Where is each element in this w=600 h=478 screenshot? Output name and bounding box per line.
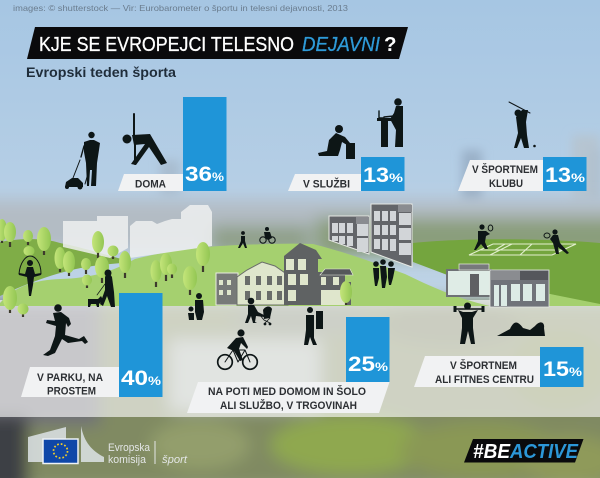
- icon: person with boxes: [304, 307, 323, 345]
- hashtag badge: [464, 439, 584, 463]
- panel: v sportnem klubu 13%: 13: [545, 163, 571, 187]
- panel: fitnes 15%: [414, 347, 584, 387]
- panel: v sluzbi 13%: [288, 157, 404, 191]
- logo: European Commission: [28, 426, 188, 466]
- panel: doma 36%: %: [212, 172, 224, 184]
- icon: woman with pram: [245, 298, 272, 325]
- icon: woman doing sit-ups: [497, 322, 545, 336]
- panel: fitnes 15%: %: [569, 367, 582, 379]
- icon: runner: [43, 304, 88, 356]
- title banner: ?: [384, 33, 397, 56]
- title banner: KJE SE EVROPEJCI TELESNO: [39, 33, 294, 56]
- panel: na poti 25%: %: [375, 362, 388, 374]
- panel: v parku 40%: %: [148, 376, 161, 388]
- panel: na poti 25%: ALI SLUŽBO, V TRGOVINAH: [220, 399, 357, 412]
- panel: v parku 40%: 40: [121, 366, 148, 390]
- logo: European Commission: Evropska: [108, 442, 151, 454]
- icon: weightlifter: [454, 302, 484, 344]
- panel: v parku 40%: PROSTEM: [47, 386, 96, 398]
- logo: building lines: [28, 426, 104, 462]
- panel: v sportnem klubu 13%: KLUBU: [489, 178, 523, 190]
- panel: v sportnem klubu 13%: %: [571, 173, 585, 185]
- panel: na poti 25%: NA POTI MED DOMOM IN ŠOLO: [208, 385, 366, 398]
- icon: small walker and bike rider: [238, 227, 275, 248]
- translucent white band behind lower row: [0, 300, 600, 417]
- panel: doma 36%: DOMA: [135, 178, 166, 190]
- panel: na poti 25%: [187, 317, 390, 413]
- logo: European Commission: šport: [162, 454, 188, 466]
- panel: doma 36%: [118, 97, 226, 191]
- panel: v sportnem klubu 13%: V ŠPORTNEM: [472, 163, 538, 176]
- panel: fitnes 15%: V ŠPORTNEM: [450, 359, 517, 372]
- icon: skipping rope woman: [19, 256, 41, 296]
- town houses: [216, 243, 353, 305]
- gym buildings: [447, 264, 549, 307]
- panel: doma 36%: 36: [185, 162, 212, 186]
- panel: v sluzbi 13%: %: [389, 173, 403, 185]
- panel: na poti 25%: 25: [348, 352, 375, 376]
- hashtag badge: #BE: [473, 441, 511, 463]
- title banner: [27, 27, 408, 59]
- hills and park: [0, 239, 600, 306]
- panel: v sluzbi 13%: V SLUŽBI: [303, 178, 350, 190]
- source line: images: © shutterstock — Vir: Eurobarometer o športu in telesni dejavnosti, 2013: [13, 3, 348, 13]
- panel: v sluzbi 13%: 13: [363, 163, 389, 187]
- icon: standing desk worker: [377, 98, 403, 147]
- icon: tennis players: [474, 224, 569, 254]
- apartment blocks: [329, 204, 412, 267]
- icon: dog walker: [88, 270, 115, 307]
- icon: kneeling worker: [318, 125, 355, 159]
- panel: v sportnem klubu 13%: [458, 157, 586, 191]
- icon: group of joggers: [373, 259, 395, 288]
- white translucent houses: [63, 205, 212, 258]
- icon: man with lawn mower: [65, 132, 100, 190]
- panel: fitnes 15%: 15: [543, 357, 569, 381]
- trees: [0, 219, 210, 317]
- subtitle: Evropski teden športa: [26, 64, 176, 80]
- title banner: DEJAVNI: [302, 33, 380, 56]
- icon: cyclist: [218, 329, 257, 369]
- logo: European Commission: komisija: [108, 454, 147, 466]
- hashtag badge: ACTIVE: [509, 441, 579, 463]
- panel: v parku 40%: [21, 293, 162, 398]
- tennis court: [469, 244, 576, 255]
- panel: fitnes 15%: ALI FITNES CENTRU: [435, 374, 534, 386]
- panel: v parku 40%: V PARKU, NA: [37, 372, 103, 384]
- icon: yoga pose: [122, 114, 167, 165]
- logo: EU flag: [43, 439, 78, 464]
- icon: golfer: [509, 102, 536, 148]
- icon: parent with child: [188, 293, 204, 320]
